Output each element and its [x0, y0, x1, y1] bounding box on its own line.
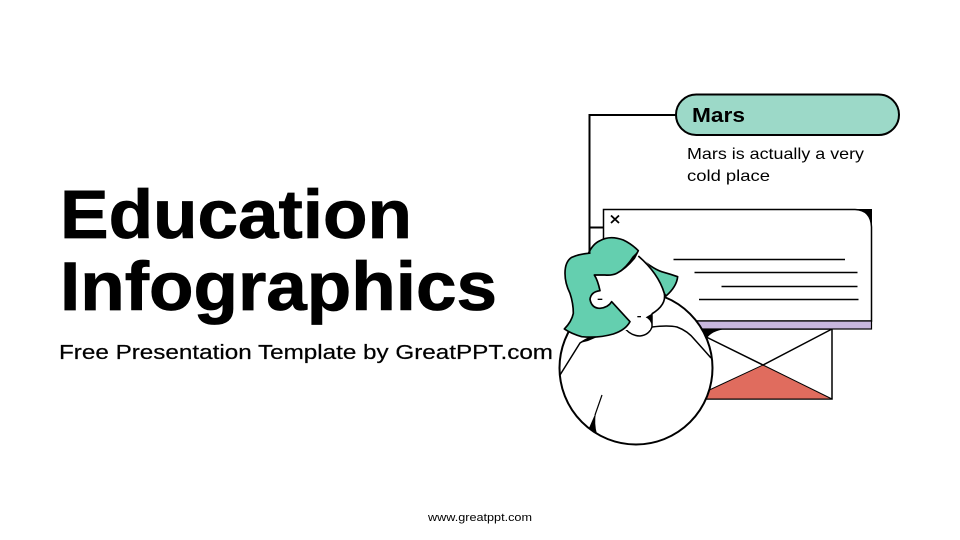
window close icon [611, 216, 619, 223]
connector overlap on hair [588, 228, 590, 254]
description text [687, 146, 864, 185]
illustration: envelope [680, 329, 832, 399]
neck [623, 312, 652, 336]
body [560, 292, 712, 444]
title: Infographics [60, 248, 497, 325]
title [60, 176, 497, 325]
connector line from label to window [590, 115, 676, 254]
label pill: Mars: Mars [692, 105, 745, 127]
label pill: Mars [676, 94, 899, 135]
front hair [564, 238, 638, 337]
back hair [637, 255, 678, 296]
illustration: person [560, 228, 712, 444]
description text: cold place [687, 168, 770, 185]
illustration: browser window [604, 209, 872, 329]
window text lines [674, 260, 858, 300]
footer url: www.greatppt.com [427, 512, 532, 524]
description text: Mars is actually a very [687, 146, 864, 163]
shoulder and arm lines [560, 326, 711, 375]
face and ear [588, 253, 665, 330]
title: Education [60, 176, 412, 253]
subtitle: Free Presentation Template by GreatPPT.com [59, 342, 553, 364]
